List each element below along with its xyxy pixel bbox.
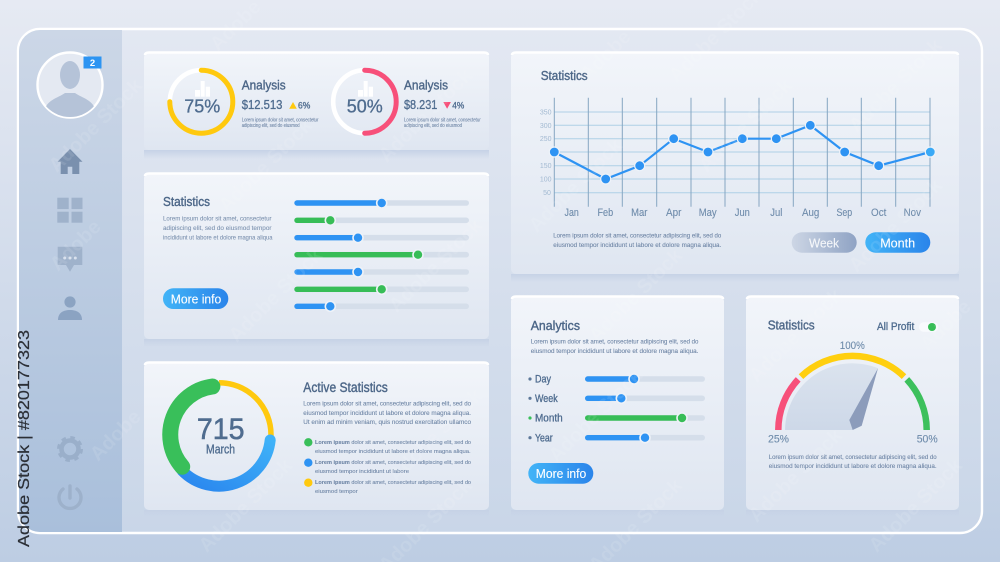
analysis text 1: adipiscing elit, sed do eiusmod <box>242 123 300 129</box>
analysis text 2: Lorem ipsum dolor sit amet, consectetur <box>404 117 481 123</box>
gauge labels <box>768 340 938 445</box>
period labels: Year <box>535 432 553 444</box>
gauge labels: 25% <box>768 433 789 445</box>
stock id caption: Adobe Stock | #820177323 <box>16 330 33 547</box>
text block: Lorem ipsum dolor sit amet, consectetur adipiscing elit, sed do <box>303 400 471 408</box>
icon: home <box>58 149 82 174</box>
line chart <box>540 98 935 219</box>
analysis text 2: adipiscing elit, sed do eiusmod <box>404 123 462 129</box>
month labels: Oct <box>871 207 886 219</box>
period sliders <box>585 374 705 443</box>
y axis labels: 250 <box>540 136 552 143</box>
watermark pattern: Adobe Stock <box>215 114 317 217</box>
donut: 50% <box>333 70 396 133</box>
legend: eiusmod tempor incididunt ut labore et dolore magna aliqua. <box>315 449 471 455</box>
button: week: Week <box>809 235 839 250</box>
watermark pattern: Adobe <box>86 406 146 466</box>
text block <box>531 338 699 355</box>
icon: person <box>58 296 82 320</box>
month labels: Jun <box>735 207 750 219</box>
month labels: Sep <box>836 207 852 219</box>
watermark pattern: Adobe Stock <box>225 244 327 347</box>
legend: Lorem ipsum dolor sit amet, consectetur adipiscing elit, sed do <box>315 480 471 486</box>
y axis labels: 50 <box>543 190 551 197</box>
month labels: Jul <box>770 207 782 219</box>
text block: eiusmod tempor incididunt ut labore et dolore magna aliqua. <box>769 463 937 470</box>
analysis text 1: $12.513 <box>242 98 282 112</box>
text block: eiusmod tempor incididunt ut labore et dolore magna aliqua. <box>553 242 722 249</box>
ring value: 715 <box>197 413 245 446</box>
text block <box>163 216 273 242</box>
period labels: Day <box>535 374 551 386</box>
analysis text 2 <box>404 77 481 129</box>
month labels: May <box>699 207 717 219</box>
text block: incididunt ut labore et dolore magna aliqua <box>163 234 273 242</box>
button: more info <box>528 463 593 484</box>
icon: power <box>59 486 81 508</box>
watermark pattern: Adobe Stock <box>845 34 947 137</box>
button: week <box>792 232 857 253</box>
text block: Lorem ipsum dolor sit amet, consectetur <box>163 216 272 222</box>
button: month <box>865 232 930 253</box>
panel: statistics line chart <box>511 52 959 282</box>
button: month: Month <box>880 235 915 250</box>
notification badge: 2 <box>90 58 95 69</box>
watermark pattern: Adobe Stock <box>845 174 947 277</box>
period labels: Month <box>535 413 563 425</box>
watermark pattern: Adobe Stock <box>865 454 967 557</box>
month labels: Feb <box>597 207 613 219</box>
watermark pattern: Adobe Stock <box>45 74 147 177</box>
analysis text 1: 6% <box>298 101 310 111</box>
watermark pattern: Adobe Stock <box>585 244 687 347</box>
ring value: March <box>206 443 235 457</box>
analysis text 2: 4% <box>452 101 464 111</box>
button: more info <box>163 288 228 309</box>
y axis labels: 150 <box>540 163 552 170</box>
y axis labels <box>540 110 552 197</box>
heading: Analytics <box>531 318 580 333</box>
watermark pattern: Adobe <box>916 296 976 356</box>
text block: Lorem ipsum dolor sit amet, consectetur adipiscing elit, sed do <box>553 232 722 240</box>
data line <box>554 125 930 179</box>
watermark pattern: Adobe <box>46 216 106 276</box>
donut: 50%: 50% <box>347 96 383 117</box>
watermark pattern: Adobe Stock <box>195 454 297 557</box>
month labels <box>565 207 921 219</box>
panel: statistics sliders <box>144 173 489 347</box>
month labels: Nov <box>904 207 921 219</box>
legend: Lorem ipsum dolor sit amet, consectetur adipiscing elit, sed do <box>315 460 471 466</box>
watermark pattern: Adobe Stock <box>525 134 627 237</box>
panel: analysis <box>144 52 489 159</box>
period labels <box>528 374 563 444</box>
watermark pattern: Adobe Stock <box>385 214 487 317</box>
month labels: Jan <box>565 207 579 219</box>
watermark pattern: Adobe Stock <box>745 424 847 527</box>
watermark pattern: Adobe <box>576 26 636 86</box>
donut: 75% <box>170 70 233 133</box>
text block <box>303 400 471 426</box>
gauge labels: 50% <box>917 433 938 445</box>
text block: adipiscing elit, sed do eiusmod tempor <box>163 225 272 232</box>
heading: Active Statistics <box>303 380 388 395</box>
legend: eiusmod tempor <box>315 489 358 495</box>
text block: Lorem ipsum dolor sit amet, consectetur adipiscing elit, sed do <box>531 338 699 346</box>
ring chart <box>170 383 271 486</box>
panel: gauge statistics <box>746 296 959 517</box>
panel: analytics <box>511 296 724 517</box>
heading: Statistics <box>541 69 588 83</box>
analysis text 1: Analysis <box>242 77 286 92</box>
slider list <box>294 198 469 311</box>
text block: Lorem ipsum dolor sit amet, consectetur adipiscing elit, sed do <box>769 454 937 461</box>
month labels: Aug <box>802 207 819 219</box>
panel: active statistics <box>144 362 489 517</box>
heading: Statistics <box>768 319 815 333</box>
month labels: Apr <box>666 207 682 219</box>
watermark pattern: Adobe Stock <box>375 64 477 167</box>
y axis labels: 350 <box>540 110 552 116</box>
icon: settings gear <box>58 438 82 460</box>
period labels: Week <box>535 393 558 405</box>
legend <box>304 438 471 495</box>
legend: Lorem ipsum dolor sit amet, consectetur adipiscing elit, sed do <box>315 440 471 446</box>
month labels: Mar <box>631 207 648 219</box>
text block: eiusmod tempor incididunt ut labore et dolore magna aliqua. <box>531 348 699 355</box>
notification badge <box>84 56 102 69</box>
analysis text 2: Analysis <box>404 77 448 92</box>
icon: chat bubble <box>58 247 82 272</box>
donut: 75%: 75% <box>184 96 220 117</box>
text block: eiusmod tempor incididunt ut labore et dolore magna aliqua. <box>303 410 471 417</box>
legend: eiusmod tempor incididunt ut labore <box>315 469 409 475</box>
text block: Ut enim ad minim veniam, quis nostrud exercitation ullamco <box>303 419 471 426</box>
watermark pattern: Adobe Stock <box>745 284 847 387</box>
gauge labels: 100% <box>840 340 865 352</box>
analysis text 1 <box>242 77 319 129</box>
button: more info: More info <box>171 291 221 306</box>
sidebar <box>19 30 122 532</box>
toggle: all profit <box>877 321 938 333</box>
y axis labels: 100 <box>540 176 552 184</box>
data points <box>549 120 935 184</box>
toggle: all profit: All Profit <box>877 321 914 333</box>
text block <box>553 232 722 249</box>
watermark pattern: Adobe Stock <box>545 364 647 467</box>
y axis labels: 300 <box>540 123 552 130</box>
icon: user avatar <box>38 52 102 120</box>
watermark pattern: Adobe Stock <box>385 384 487 487</box>
icon: grid <box>57 198 82 223</box>
watermark pattern: Adobe Stock <box>695 74 797 177</box>
gauge <box>778 356 927 430</box>
heading: Statistics <box>163 195 210 209</box>
button: more info: More info <box>536 466 586 481</box>
text block <box>769 454 937 470</box>
analysis text 1: Lorem ipsum dolor sit amet, consectetur <box>242 117 319 123</box>
analysis text 2: $8.231 <box>404 98 437 112</box>
